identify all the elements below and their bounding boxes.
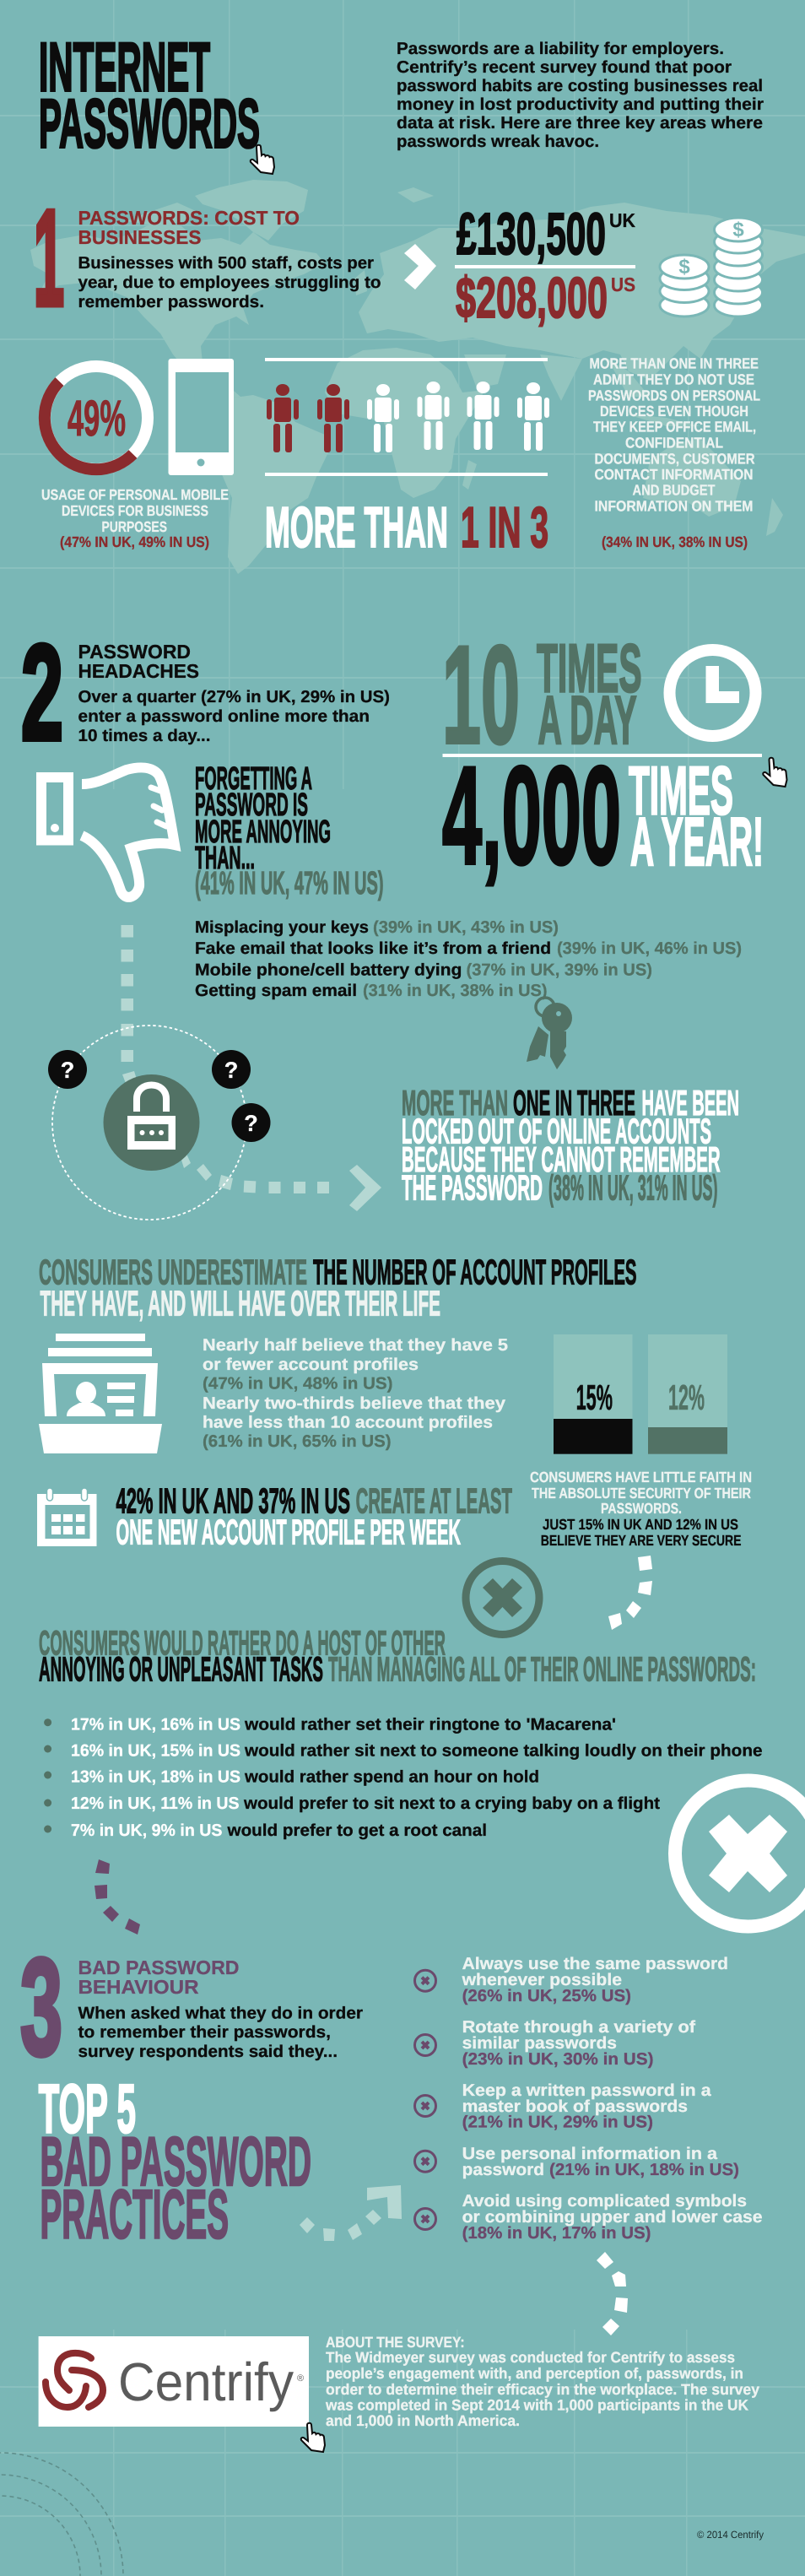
section 3 heading: BAD PASSWORD: [78, 1956, 240, 1978]
about the survey text: was completed in Sept 2014 with 1,000 participants in the UK: [325, 2397, 748, 2414]
divider line: [442, 754, 762, 757]
Centrify logo: [39, 2336, 309, 2427]
icon: coin stacks: $: [732, 219, 744, 241]
section 3 body text: survey respondents said they...: [78, 2043, 338, 2061]
section 2 body text: Over a quarter (27% in UK, 29% in US): [78, 688, 390, 706]
section 1 body text: [78, 254, 381, 311]
section 3 body text: to remember their passwords,: [78, 2023, 331, 2042]
caption: no passwords on devices: CONFIDENTIAL: [625, 434, 723, 451]
caption: little faith in password security: BELIEVE THEY ARE VERY SECURE: [541, 1532, 741, 1549]
text: beliefs about account profiles: Nearly half believe that they have 5: [203, 1336, 508, 1355]
caption: mobile usage: [41, 486, 229, 550]
text: beliefs about account profiles: [203, 1336, 508, 1451]
text: 1: [34, 182, 64, 334]
caption: no passwords on devices: [588, 355, 760, 550]
text: beliefs about account profiles: (61% in UK, 65% in US): [203, 1432, 392, 1451]
dotted arrow path to locked-out stat: [122, 925, 381, 1211]
bullet list: unpleasant tasks: 16% in UK, 15% in US: [71, 1742, 240, 1761]
bullet list: unpleasant tasks: 12% in UK, 11% in US: [71, 1794, 240, 1813]
section 3 body text: When asked what they do in order: [78, 2005, 363, 2023]
stat: locked out of accounts: [402, 1083, 739, 1207]
list: annoyances: Getting spam email: [195, 982, 357, 1000]
caption: no passwords on devices: THEY KEEP OFFICE EMAIL,: [593, 419, 756, 436]
intro text: [397, 40, 764, 151]
list: annoyances: (31% in UK, 38% in US): [363, 982, 547, 1000]
caption: no passwords on devices: CONTACT INFORMATION: [594, 466, 753, 483]
list: annoyances: Mobile phone/cell battery dying: [195, 961, 462, 980]
list: annoyances: Fake email that looks like it’s from a friend: [195, 939, 551, 958]
item: same password: whenever possible: [462, 1971, 622, 1989]
icon: mobile device: [169, 359, 234, 475]
heading: top 5 bad password practices: PRACTICES: [41, 2176, 229, 2254]
title: [39, 29, 260, 162]
icon: chevron arrow: [404, 244, 436, 290]
intro text: Passwords are a liability for employers.: [397, 40, 724, 58]
heading: forgetting a password: THAN...: [195, 841, 255, 876]
bullet list: unpleasant tasks: 7% in UK, 9% in US: [71, 1821, 222, 1840]
text: beliefs about account profiles: or fewer account profiles: [203, 1356, 419, 1374]
item: personal information: password: [462, 2161, 544, 2179]
item: complicated symbols: [415, 2192, 763, 2243]
icon: coin stacks: $: [678, 256, 690, 279]
item: rotate passwords: Rotate through a variety of: [462, 2018, 695, 2037]
heading: forgetting a password: PASSWORD IS: [195, 787, 308, 823]
heading: consumers would rather: ANNOYING OR UNPLEASANT TASKS: [39, 1649, 323, 1688]
stat: locked out of accounts: ONE IN THREE: [513, 1083, 635, 1123]
icon: padlock with question marks: ?: [244, 1111, 258, 1136]
caption: no passwords on devices: DEVICES EVEN THOUGH: [600, 403, 748, 419]
intro text: passwords wreak havoc.: [397, 133, 599, 151]
icon: clock: [670, 650, 756, 736]
stat: 4000 times a year: 4,000: [442, 738, 621, 893]
cost figures: US: [611, 273, 635, 295]
dotted path purple: [95, 1859, 140, 1935]
caption: mobile usage: USAGE OF PERSONAL MOBILE: [41, 486, 229, 503]
cost figures: [455, 201, 635, 330]
caption: little faith in password security: THE ABSOLUTE SECURITY OF THEIR: [532, 1485, 751, 1502]
list: bad practices: [415, 1955, 763, 2243]
bar chart: security confidence: 15%: [576, 1377, 613, 1417]
bullet list: unpleasant tasks: 17% in UK, 16% in US: [71, 1715, 240, 1734]
icon: coin stacks: [660, 218, 763, 317]
section 3 heading: [78, 1956, 240, 1998]
cost figures: $208,000: [456, 266, 608, 330]
section 1 body text: remember passwords.: [78, 293, 264, 311]
stat: 10 times a day: 10: [442, 617, 520, 772]
title: INTERNET: [39, 29, 210, 106]
caption: no passwords on devices: ADMIT THEY DO NOT USE: [593, 371, 754, 387]
section 1 heading: BUSINESSES: [78, 226, 201, 248]
about the survey text: order to determine their efficacy in the workplace. The survey: [326, 2381, 759, 2398]
list: annoyances: [195, 918, 742, 1000]
text: PASSWORDS: [39, 86, 260, 162]
item: complicated symbols: or combining upper and lower case: [462, 2208, 763, 2227]
item: rotate passwords: [415, 2018, 695, 2069]
donut chart 49%: 49%: [68, 390, 126, 446]
stat: 10 times a day: A DAY: [538, 683, 636, 759]
icon: keys: [527, 998, 572, 1069]
cost figures: UK: [609, 209, 635, 231]
Centrify logo: ®: [297, 2373, 304, 2384]
stat: locked out of accounts: THE PASSWORD: [402, 1168, 543, 1207]
bullet list: unpleasant tasks: [44, 1715, 763, 1840]
section 2 heading: PASSWORD: [78, 641, 191, 663]
bar chart: security confidence: 12%: [668, 1377, 705, 1417]
about the survey text: and 1,000 in North America.: [326, 2412, 520, 2429]
item: complicated symbols: (18% in UK, 17% in US): [462, 2224, 651, 2243]
dashed arcs decoration: [0, 2453, 123, 2576]
icon: crossed circle white large: [675, 1781, 805, 1926]
caption: mobile usage: DEVICES FOR BUSINESS: [62, 502, 208, 519]
text: beliefs about account profiles: have less than 10 account profiles: [203, 1414, 493, 1432]
item: written password: Keep a written password in a: [462, 2081, 712, 2100]
bullet list: unpleasant tasks: would prefer to get a root canal: [226, 1821, 487, 1840]
world map background: [30, 180, 805, 574]
stat: new account profile per week: 42% IN UK AND 37% IN US: [116, 1480, 350, 1521]
caption: no passwords on devices: INFORMATION ON THEM: [594, 497, 753, 514]
section 1 heading: [78, 207, 300, 248]
about the survey text: The Widmeyer survey was conducted for Centrify to assess: [326, 2349, 735, 2366]
text: beliefs about account profiles: Nearly two-thirds believe that they: [203, 1394, 506, 1413]
stat: 10 times a day: TIMES: [537, 631, 641, 707]
section 3 heading: BEHAVIOUR: [78, 1976, 199, 1998]
text: BAD PASSWORD: [41, 2124, 311, 2200]
heading: more than 1 in 3: 1 IN 3: [461, 495, 548, 560]
donut chart 49%: [45, 366, 148, 469]
heading: top 5 bad password practices: [39, 2071, 311, 2254]
caption: mobile usage: PURPOSES: [101, 518, 167, 535]
section 3 number: 3: [20, 1929, 62, 2084]
item: rotate passwords: (23% in UK, 30% in US): [462, 2050, 653, 2069]
text: beliefs about account profiles: (47% in UK, 48% in US): [203, 1375, 393, 1394]
caption: no passwords on devices: AND BUDGET: [633, 482, 716, 499]
Centrify logo: Centrify: [118, 2351, 294, 2412]
list: annoyances: (39% in UK, 46% in US): [557, 939, 742, 958]
people chart 1 in 3: [265, 358, 549, 476]
heading: top 5 bad password practices: TOP 5: [39, 2071, 136, 2147]
icon: crossed circle green: [466, 1561, 539, 1634]
dotted path white: [608, 1556, 652, 1630]
intro text: password habits are costing businesses real: [397, 77, 763, 95]
item: personal information: Use personal information in a: [462, 2145, 718, 2163]
section 1 body text: year, due to employees struggling to: [78, 273, 381, 292]
about the survey text: ABOUT THE SURVEY:: [326, 2334, 465, 2351]
item: same password: [415, 1955, 728, 2005]
list: annoyances: (37% in UK, 39% in US): [466, 961, 652, 980]
icon: padlock with question marks: ?: [224, 1058, 238, 1083]
heading: consumers would rather: [39, 1624, 756, 1688]
heading: consumers underestimate: [39, 1253, 636, 1323]
intro text: data at risk. Here are three key areas where: [397, 114, 763, 133]
dotted arrow pale: [300, 2185, 402, 2241]
copyright: © 2014 Centrify: [697, 2529, 764, 2541]
list: annoyances: Misplacing your keys: [195, 918, 369, 937]
about the survey text: [325, 2334, 759, 2429]
caption: little faith in password security: JUST 15% IN UK AND 12% IN US: [543, 1516, 738, 1533]
section 2 heading: [78, 641, 199, 682]
item: written password: (21% in UK, 29% in US): [462, 2113, 653, 2132]
item: same password: Always use the same password: [462, 1955, 728, 1973]
icon: padlock with question marks: ?: [61, 1058, 74, 1083]
bullet list: unpleasant tasks: would rather spend an hour on hold: [244, 1768, 539, 1787]
caption: little faith in password security: [530, 1469, 752, 1549]
caption: little faith in password security: CONSUMERS HAVE LITTLE FAITH IN: [530, 1469, 752, 1486]
caption: no passwords on devices: (34% IN UK, 38% IN US): [602, 533, 748, 550]
item: complicated symbols: Avoid using complicated symbols: [462, 2192, 747, 2211]
icon: pointer hand stat: [763, 758, 786, 787]
text: CREATE AT LEAST: [356, 1480, 512, 1521]
icon: account profile tray: [39, 1334, 162, 1453]
icon: thumbs down: [41, 768, 175, 897]
list: annoyances: (39% in UK, 43% in US): [373, 918, 559, 937]
icon: pointer hand title: [251, 145, 274, 174]
icon: padlock with question marks: [48, 1026, 270, 1220]
heading: forgetting a password: MORE ANNOYING: [195, 814, 331, 850]
heading: consumers underestimate: CONSUMERS UNDERESTIMATE: [39, 1253, 307, 1291]
stat: locked out of accounts: MORE THAN: [402, 1083, 508, 1123]
item: same password: (26% in UK, 25% US): [462, 1987, 631, 2005]
section 2 body text: 10 times a day...: [78, 727, 211, 745]
caption: no passwords on devices: MORE THAN ONE IN THREE: [589, 355, 759, 372]
item: personal information: [415, 2145, 739, 2179]
bar chart: security confidence: [554, 1334, 727, 1454]
section 2 heading: HEADACHES: [78, 660, 199, 682]
item: written password: master book of passwords: [462, 2097, 688, 2116]
section 1 body text: Businesses with 500 staff, costs per: [78, 254, 374, 273]
section 3 body text: [78, 2005, 363, 2061]
stat: new account profile per week: [116, 1480, 512, 1551]
item: rotate passwords: similar passwords: [462, 2034, 617, 2053]
section 2 body text: enter a password online more than: [78, 707, 370, 726]
caption: no passwords on devices: DOCUMENTS, CUSTOMER: [594, 450, 755, 467]
about the survey text: people’s engagement with, and perception of, passwords, in: [326, 2365, 743, 2382]
section 1 heading: PASSWORDS: COST TO: [78, 207, 300, 229]
bullet list: unpleasant tasks: would rather sit next to someone talking loudly on their phone: [244, 1742, 763, 1761]
cost figures: £130,500: [457, 201, 606, 267]
bullet list: unpleasant tasks: 13% in UK, 18% in US: [71, 1768, 240, 1787]
caption: mobile usage: (47% IN UK, 49% IN US): [60, 533, 209, 550]
intro text: money in lost productivity and putting their: [397, 95, 764, 114]
item: written password: [415, 2081, 712, 2132]
intro text: Centrify’s recent survey found that poor: [397, 58, 732, 77]
section 2 number: 2: [21, 617, 63, 769]
icon: calendar: [37, 1488, 96, 1546]
icon: pointer hand logo: [301, 2423, 325, 2452]
bullet list: unpleasant tasks: would rather set their ringtone to 'Macarena': [244, 1715, 616, 1734]
dotted path white lower: [597, 2252, 628, 2335]
heading: forgetting a password: FORGETTING A: [195, 761, 312, 797]
item: personal information: (21% in UK, 18% in US): [549, 2161, 739, 2179]
caption: little faith in password security: PASSWORDS.: [601, 1500, 682, 1517]
bullet list: unpleasant tasks: would prefer to sit next to a crying baby on a flight: [243, 1794, 660, 1813]
heading: forgetting a password: [195, 761, 383, 901]
caption: no passwords on devices: PASSWORDS ON PERSONAL: [588, 387, 760, 403]
heading: more than 1 in 3: MORE THAN: [265, 495, 448, 560]
heading: forgetting a password: (41% IN UK, 47% IN US): [195, 866, 383, 901]
section 2 body text: [78, 688, 390, 745]
